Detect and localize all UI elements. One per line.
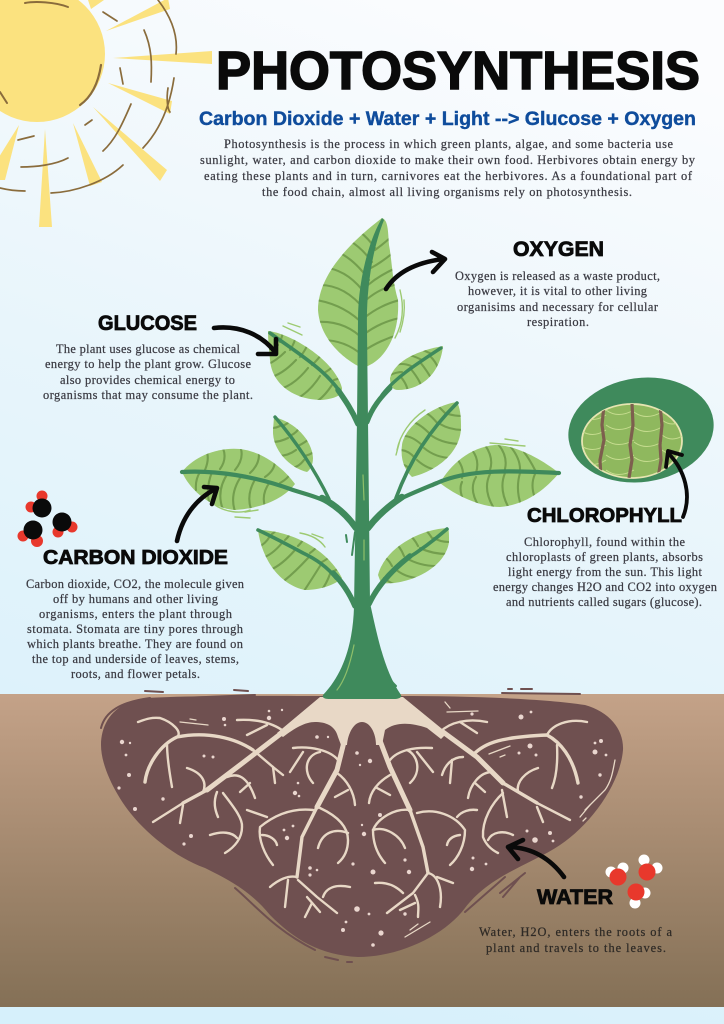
- text: carbon dioxide: [26, 577, 244, 681]
- heading: carbon dioxide: CARBON DIOXIDE: [43, 547, 228, 569]
- arrow: to oxygen: [386, 252, 445, 289]
- icon: carbon dioxide molecules: [18, 490, 78, 547]
- leaf: upper left: [268, 331, 342, 400]
- leaf: middle left: [273, 418, 313, 472]
- text: chlorophyll: and nutrients called sugars (glucose).: [506, 595, 702, 609]
- text: oxygen: respiration.: [527, 315, 589, 329]
- soil with roots: [101, 689, 623, 962]
- roots: branches: [145, 735, 578, 877]
- leaf: middle right: [402, 402, 461, 477]
- text: chlorophyll: light energy from the sun. This light: [508, 565, 703, 579]
- title: PHOTOSYNTHESIS: [216, 41, 700, 101]
- text: glucose: energy to help the plant grow. Glucose: [45, 357, 252, 371]
- heading: oxygen: OXYGEN: [513, 238, 604, 261]
- icon: sun: [0, 0, 212, 227]
- intro paragraph: Photosynthesis is the process in which green plants, algae, and some bacteria use: [224, 137, 674, 151]
- text: oxygen: Oxygen is released as a waste product,: [455, 269, 660, 283]
- leaf: lower left big: [183, 448, 295, 510]
- text: water: Water, H2O, enters the roots of a: [479, 925, 672, 939]
- leaf: bottom left: [258, 530, 342, 590]
- heading: glucose: GLUCOSE: [98, 312, 197, 335]
- text: water: plant and travels to the leaves.: [486, 941, 666, 955]
- text: oxygen: however, it is vital to other living: [468, 284, 647, 298]
- text: glucose: [43, 342, 253, 402]
- text: carbon dioxide: roots, and flower petals.: [71, 667, 200, 681]
- soil dots: [117, 709, 607, 947]
- trunk and stems: [182, 218, 559, 699]
- text: carbon dioxide: the top and underside of leaves, stems,: [32, 652, 239, 666]
- arrow: to carbon dioxide leaf: [177, 487, 217, 541]
- leaf: lower right big: [440, 445, 558, 507]
- text: carbon dioxide: organisms, enters the plant through: [39, 607, 233, 621]
- text: carbon dioxide: which plants breathe. They are found on: [27, 637, 243, 651]
- heading: chlorophyll: CHLOROPHYLL: [527, 505, 682, 527]
- arrow: to chlorophyll: [666, 451, 687, 517]
- text: chlorophyll: Chlorophyll, found within the: [524, 535, 686, 549]
- root crown: [277, 697, 447, 745]
- icon: chloroplast: [568, 378, 714, 482]
- subtitle: equation: Carbon Dioxide + Water + Light --> Glucose + Oxygen: [199, 108, 696, 130]
- text: oxygen: organisims and necessary for cellular: [457, 300, 659, 314]
- intro paragraph: the food chain, almost all living organisms rely on photosynthesis.: [262, 185, 632, 199]
- icon: water molecules: [606, 854, 662, 908]
- leaf sketch marks: [215, 290, 525, 547]
- arrow: to glucose leaf: [214, 327, 276, 354]
- arrow: to water roots: [508, 840, 564, 877]
- text: chlorophyll: energy changes H2O and CO2 into oxygen: [493, 580, 717, 594]
- leaf: bottom right: [378, 528, 449, 584]
- text: carbon dioxide: off by humans and other living: [53, 592, 218, 606]
- plant: [178, 210, 564, 699]
- text: oxygen: [455, 269, 660, 329]
- text: glucose: organisms that may consume the plant.: [43, 388, 253, 402]
- text: carbon dioxide: stomata. Stomata are tiny pores through: [27, 622, 244, 636]
- text: glucose: The plant uses glucose as chemical: [56, 342, 241, 356]
- intro paragraph: sunlight, water, and carbon dioxide to make their own food. Herbivores obtain energy by: [200, 153, 696, 167]
- text: glucose: also provides chemical energy to: [60, 373, 235, 387]
- text: carbon dioxide: Carbon dioxide, CO2, the molecule given: [26, 577, 244, 591]
- intro paragraph: eating these plants and in turn, carnivores eat the herbivores. As a foundational part of: [204, 169, 693, 183]
- text: water: [479, 925, 672, 955]
- ground: [0, 694, 724, 1007]
- roots: trunks: [207, 732, 503, 810]
- heading: water: WATER: [537, 886, 613, 909]
- text: chlorophyll: [493, 535, 717, 609]
- leaf: top large: [318, 218, 398, 366]
- text: chlorophyll: chloroplasts of green plants, absorbs: [506, 550, 703, 564]
- intro paragraph: [200, 137, 696, 199]
- leaf: upper right: [390, 346, 443, 390]
